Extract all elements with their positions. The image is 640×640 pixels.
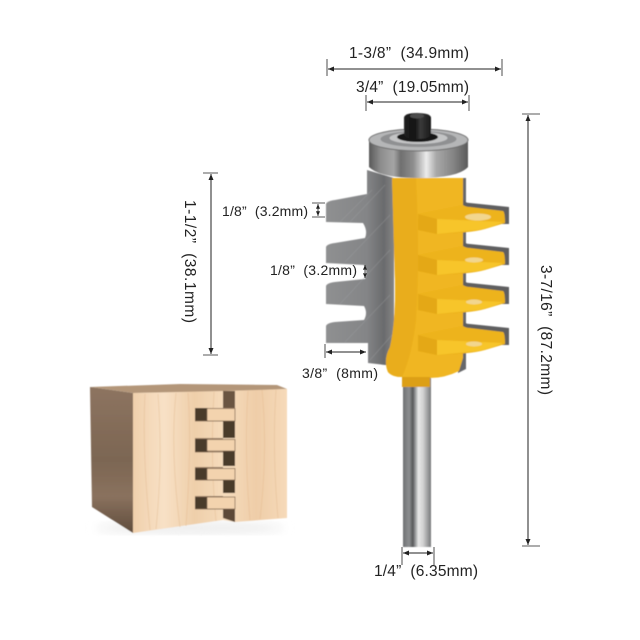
label: finger depth: 3/8” (8mm) [302, 365, 378, 381]
dimension: shank diameter [402, 547, 434, 565]
wood grain [144, 390, 278, 530]
wood joint sample [90, 384, 287, 534]
body left shaded band [386, 178, 418, 377]
yellow body [386, 178, 463, 387]
finger 2 [418, 239, 509, 275]
block shadow [95, 522, 285, 534]
label: finger thickness: 1/8” (3.2mm) [222, 203, 308, 219]
label: overall width: 1-3/8” (34.9mm) [349, 45, 469, 62]
label: shank diameter: 1/4” (6.35mm) [374, 563, 478, 580]
neck shade [402, 377, 430, 387]
label: cutting height: 1-1/2” (38.1mm) [181, 200, 198, 323]
shank [403, 375, 431, 547]
dimension: finger gap [364, 265, 366, 278]
router bit [326, 113, 509, 547]
label: bearing width: 3/4” (19.05mm) [356, 79, 469, 96]
finger 1 [418, 198, 509, 234]
label: overall length: 3-7/16” (87.2mm) [537, 265, 554, 395]
left piece tabs outline [195, 421, 223, 509]
block left face [90, 387, 133, 533]
block front face [133, 389, 287, 533]
finger joint tongues [207, 408, 235, 509]
dimension: cutting height [203, 173, 218, 355]
label: finger gap: 1/8” (3.2mm) [270, 262, 357, 278]
dimension: bearing width [366, 95, 469, 111]
finger 4 [418, 319, 509, 355]
bearing [369, 140, 468, 178]
bolt [404, 113, 431, 139]
right side carbide backing [458, 178, 466, 373]
carbide grain [340, 185, 392, 360]
block top face [90, 384, 287, 393]
dimension: overall width [327, 59, 502, 76]
finger 3 [418, 278, 509, 314]
dimension: finger depth [325, 344, 366, 358]
carbide cutters, left side [326, 170, 394, 366]
finger joint recesses [195, 391, 235, 522]
dimension: overall length [522, 114, 540, 546]
dimension: finger thickness [312, 203, 325, 217]
